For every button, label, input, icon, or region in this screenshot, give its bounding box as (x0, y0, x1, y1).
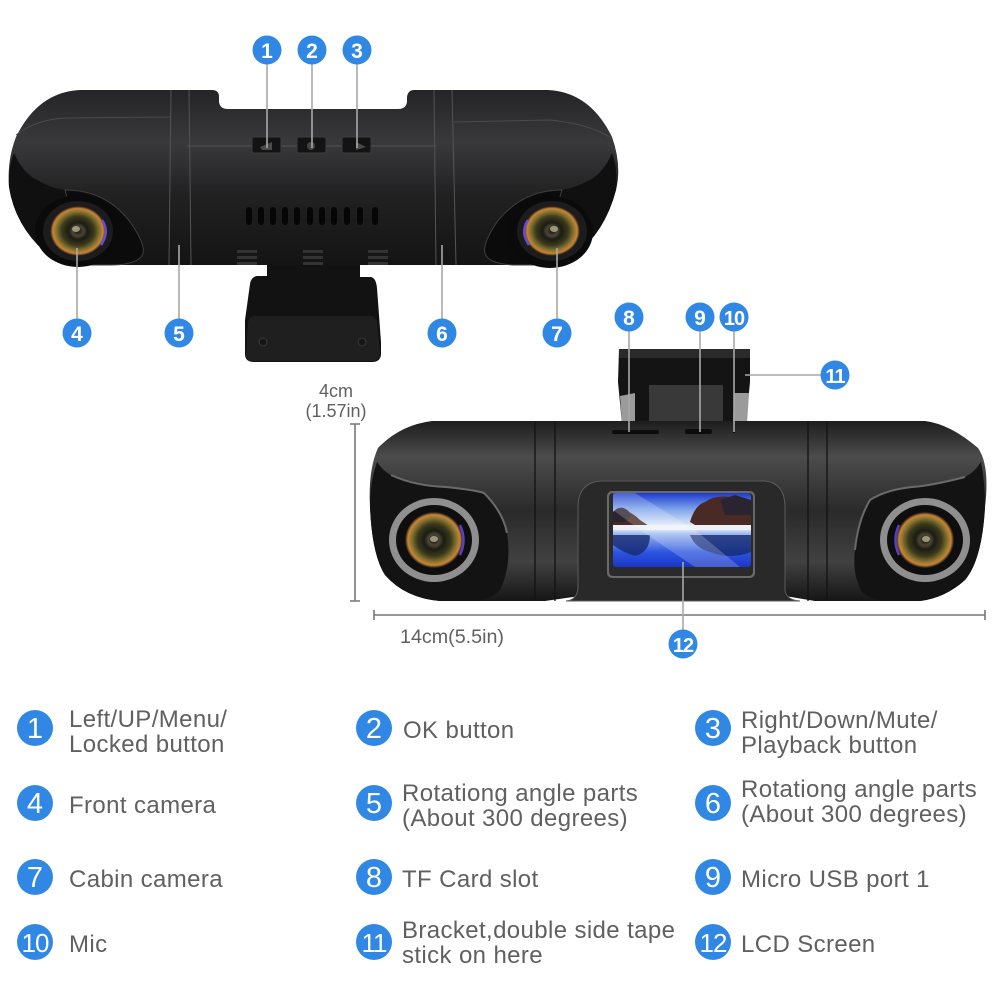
legend (17, 706, 977, 969)
dimension: height: (1.57in) (305, 401, 367, 421)
legend 10 (17, 924, 107, 960)
leader lines (77, 60, 822, 632)
legend 1 (17, 706, 227, 758)
LCD bezel (566, 481, 800, 601)
dimension: height (305, 381, 367, 601)
legend 6: (About 300 degrees) (741, 801, 967, 828)
legend 7: 7 (27, 862, 43, 894)
LCD screen landscape (613, 493, 751, 567)
legend 4: 4 (27, 788, 43, 820)
callout markers on the product: 3 (351, 40, 363, 63)
legend 11 (356, 917, 675, 969)
callout markers on the product: 6 (436, 323, 448, 346)
callout markers on the product: 11 (825, 366, 845, 388)
legend 9: Micro USB port 1 (741, 866, 930, 893)
legend 11: Bracket,double side tape (402, 917, 675, 944)
left lens, rear (389, 498, 479, 582)
legend 1: Locked button (69, 731, 225, 758)
legend 5 (356, 780, 638, 832)
callout markers on the product: 4 (71, 323, 83, 346)
callout markers on the product: 12 (673, 635, 694, 657)
buttons 1-3 (252, 137, 371, 153)
rear view camera (370, 349, 986, 601)
legend 4: Front camera (69, 792, 217, 819)
bracket, top view (245, 258, 381, 362)
callout markers on the product (62, 36, 850, 658)
right lens, rear (880, 498, 970, 582)
dimension: width: 14cm(5.5in) (400, 626, 504, 648)
legend 7: Cabin camera (69, 866, 223, 893)
legend 3: Playback button (741, 732, 917, 759)
right cowling (854, 462, 985, 601)
left cowling (370, 462, 508, 601)
legend 12: 12 (700, 928, 727, 958)
callout markers on the product: 10 (724, 308, 745, 330)
legend 1: Left/UP/Menu/ (69, 706, 227, 733)
legend 2: 2 (366, 713, 382, 745)
legend 2: OK button (403, 717, 514, 744)
bracket, rear view (618, 349, 750, 424)
callout markers on the product: 7 (551, 323, 563, 346)
speaker vents (246, 207, 378, 225)
legend 10: 10 (22, 928, 49, 958)
legend 5: Rotationg angle parts (402, 780, 638, 807)
ports 8, 9, 10 (612, 428, 735, 434)
callout markers on the product: 8 (623, 307, 635, 330)
legend 5: 5 (366, 788, 382, 820)
legend 5: (About 300 degrees) (402, 805, 628, 832)
callout markers on the product: 5 (173, 323, 185, 346)
legend 8 (356, 859, 539, 895)
legend 6: Rotationg angle parts (741, 776, 977, 803)
lower left body band (9, 153, 131, 265)
legend 10: Mic (69, 931, 107, 958)
legend 3: Right/Down/Mute/ (741, 707, 938, 734)
legend 4 (17, 785, 217, 821)
legend 2 (356, 710, 514, 746)
legend 11: stick on here (402, 942, 543, 969)
top view camera (9, 90, 618, 362)
legend 11: 11 (362, 928, 387, 958)
legend 8: TF Card slot (402, 866, 539, 893)
legend 6 (695, 776, 977, 828)
legend 12 (695, 924, 876, 960)
dimension: height: 4cm (319, 381, 353, 401)
cabin lens (485, 190, 593, 268)
legend 1: 1 (27, 713, 43, 745)
camera body, rear view (370, 421, 986, 601)
callout markers on the product: 2 (306, 40, 318, 63)
legend 3: 3 (705, 713, 721, 745)
camera body, top view (9, 90, 618, 265)
legend 12: LCD Screen (741, 931, 876, 958)
dimension: width (374, 610, 985, 648)
callout markers on the product: 1 (261, 40, 273, 63)
legend 7 (17, 859, 223, 895)
legend 3 (695, 707, 938, 759)
legend 9: 9 (705, 862, 721, 894)
front lens (35, 190, 143, 267)
lower right body band (496, 153, 616, 265)
legend 9 (695, 859, 930, 895)
legend 6: 6 (705, 788, 721, 820)
legend 8: 8 (366, 862, 382, 894)
callout markers on the product: 9 (694, 307, 706, 330)
